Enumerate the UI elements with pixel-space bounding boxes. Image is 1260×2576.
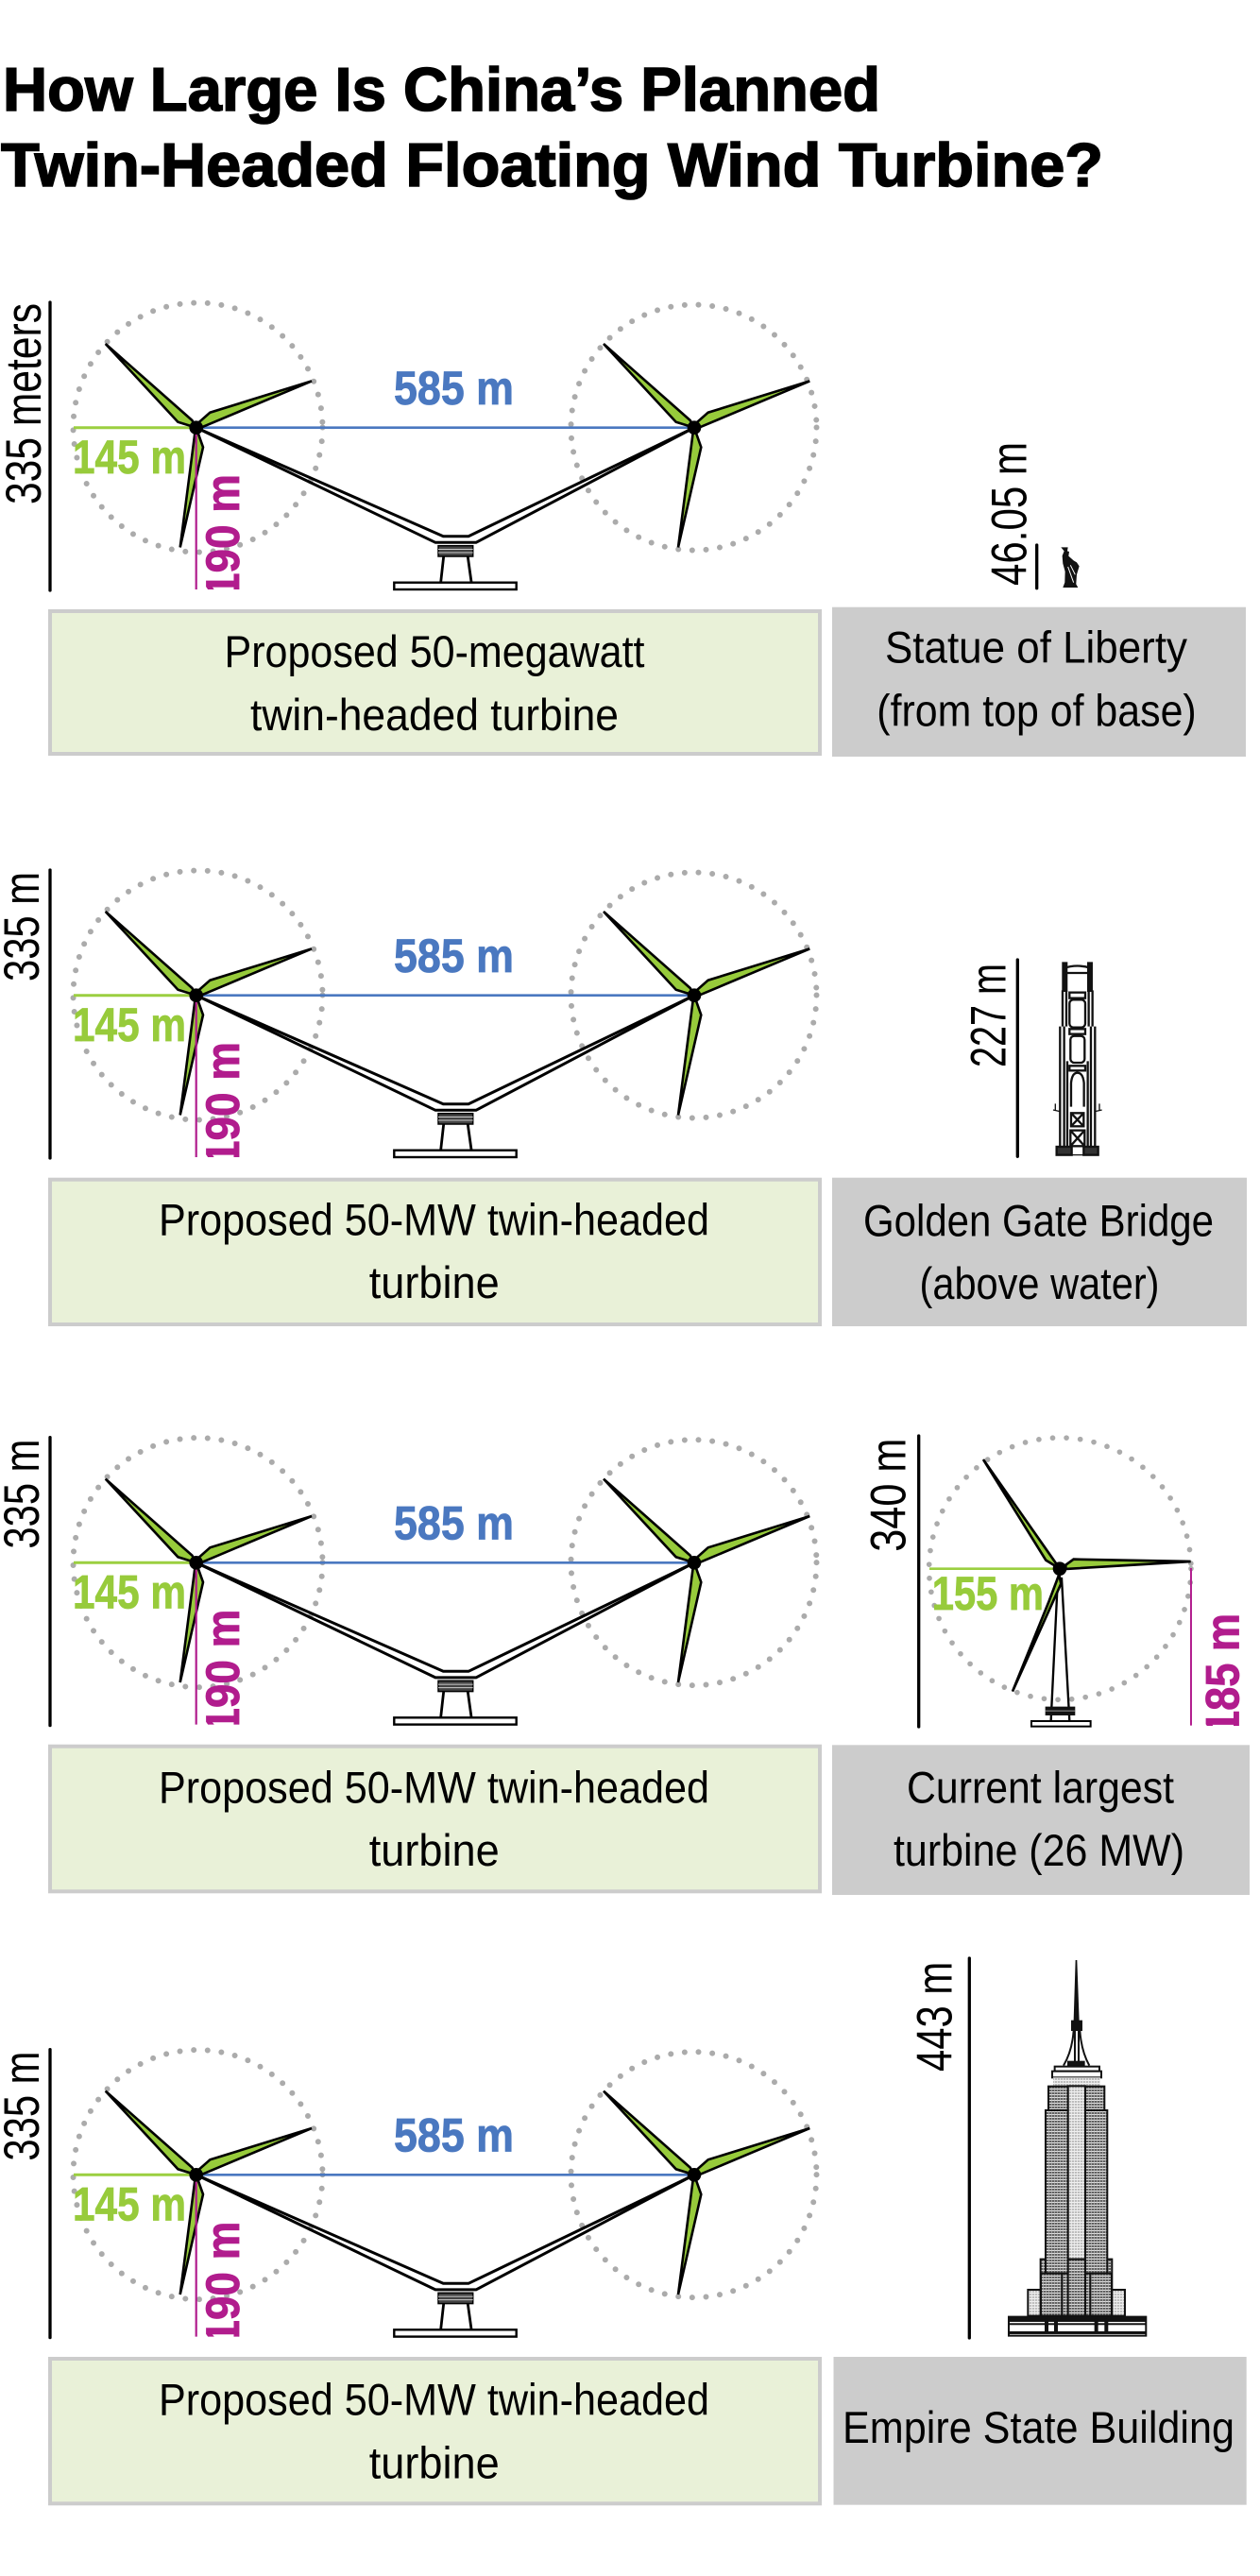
caption: current largest turbine: Current largest xyxy=(907,1762,1174,1812)
hub height label: 190 m xyxy=(196,474,249,597)
caption: Empire State Building: Empire State Building xyxy=(843,2402,1234,2452)
Empire State Building height axis and label: 443 m xyxy=(908,1962,963,2072)
span label: 585 m xyxy=(394,1497,514,1550)
hub height label: 185 m xyxy=(1197,1613,1250,1734)
caption: Golden Gate Bridge: (above water) xyxy=(920,1258,1160,1308)
icon: Statue of Liberty xyxy=(1061,547,1080,588)
panel: row 1 twin turbine vs Statue of Liberty xyxy=(0,302,1246,757)
title: How Large Is China’s Planned xyxy=(3,55,880,124)
caption: proposed turbine: Proposed 50-MW twin-headed xyxy=(159,1194,709,1244)
hub height label: 190 m xyxy=(196,1610,249,1732)
title: Twin-Headed Floating Wind Turbine? xyxy=(1,130,1103,199)
caption: proposed turbine xyxy=(50,1180,820,1324)
blade length label: 145 m xyxy=(73,1566,186,1619)
caption: proposed turbine xyxy=(50,611,820,754)
height axis xyxy=(48,870,52,1158)
caption: Empire State Building xyxy=(833,2357,1247,2505)
twin-headed turbine diagram xyxy=(0,302,816,597)
caption: Statue of Liberty xyxy=(832,607,1246,757)
turbine drawing xyxy=(74,302,816,589)
caption: current largest turbine xyxy=(832,1745,1250,1895)
twin-headed turbine diagram xyxy=(0,1438,816,1732)
rotor radius label: 155 m xyxy=(932,1567,1044,1620)
height axis xyxy=(48,302,52,590)
panel: row 4 twin turbine vs Empire State Building xyxy=(0,1958,1247,2505)
icon: Golden Gate Bridge tower xyxy=(1053,962,1102,1155)
height label: 340 m xyxy=(860,1439,916,1552)
span label: 585 m xyxy=(394,930,514,982)
caption: proposed turbine xyxy=(50,1747,820,1891)
caption: Golden Gate Bridge xyxy=(832,1178,1247,1326)
blade length label: 145 m xyxy=(73,2178,186,2231)
Statue of Liberty height axis and label: 46.05 m xyxy=(982,442,1038,586)
turbine drawing xyxy=(929,1438,1191,1727)
panel: row 3 twin turbine vs current largest turbine xyxy=(0,1436,1250,1895)
height axis xyxy=(48,1438,52,1726)
caption: proposed turbine xyxy=(50,2359,820,2503)
caption: proposed turbine: Proposed 50-MW twin-headed xyxy=(159,2375,709,2425)
twin-headed turbine diagram xyxy=(0,2050,816,2345)
caption: proposed turbine: Proposed 50-MW twin-headed xyxy=(159,1762,709,1812)
Golden Gate Bridge height axis and label: 227 m xyxy=(961,964,1016,1067)
hub height label: 190 m xyxy=(196,2222,249,2345)
blade length label: 145 m xyxy=(73,431,186,484)
current largest turbine diagram xyxy=(860,1436,1250,1734)
turbine drawing xyxy=(74,871,816,1157)
turbine drawing xyxy=(74,1438,816,1725)
height axis xyxy=(48,2050,52,2338)
caption: current largest turbine: turbine (26 MW) xyxy=(894,1825,1184,1875)
twin-headed turbine diagram xyxy=(0,870,816,1165)
caption: Statue of Liberty: (from top of base) xyxy=(877,685,1197,735)
hub height label: 190 m xyxy=(196,1042,249,1165)
caption: proposed turbine: twin-headed turbine xyxy=(250,690,619,740)
icon: Empire State Building xyxy=(1008,1960,1147,2336)
caption: Statue of Liberty: Statue of Liberty xyxy=(885,623,1187,673)
caption: proposed turbine: turbine xyxy=(369,1825,500,1875)
caption: proposed turbine: turbine xyxy=(369,2437,500,2487)
caption: proposed turbine: Proposed 50-megawatt xyxy=(225,626,644,676)
span label: 585 m xyxy=(394,2109,514,2162)
caption: Golden Gate Bridge: Golden Gate Bridge xyxy=(863,1195,1214,1245)
height axis xyxy=(917,1436,920,1727)
blade length label: 145 m xyxy=(73,998,186,1051)
caption: proposed turbine: turbine xyxy=(369,1257,500,1307)
panel: row 2 twin turbine vs Golden Gate Bridge xyxy=(0,870,1247,1326)
turbine drawing xyxy=(74,2050,816,2337)
title xyxy=(1,55,1103,199)
span label: 585 m xyxy=(394,362,514,415)
